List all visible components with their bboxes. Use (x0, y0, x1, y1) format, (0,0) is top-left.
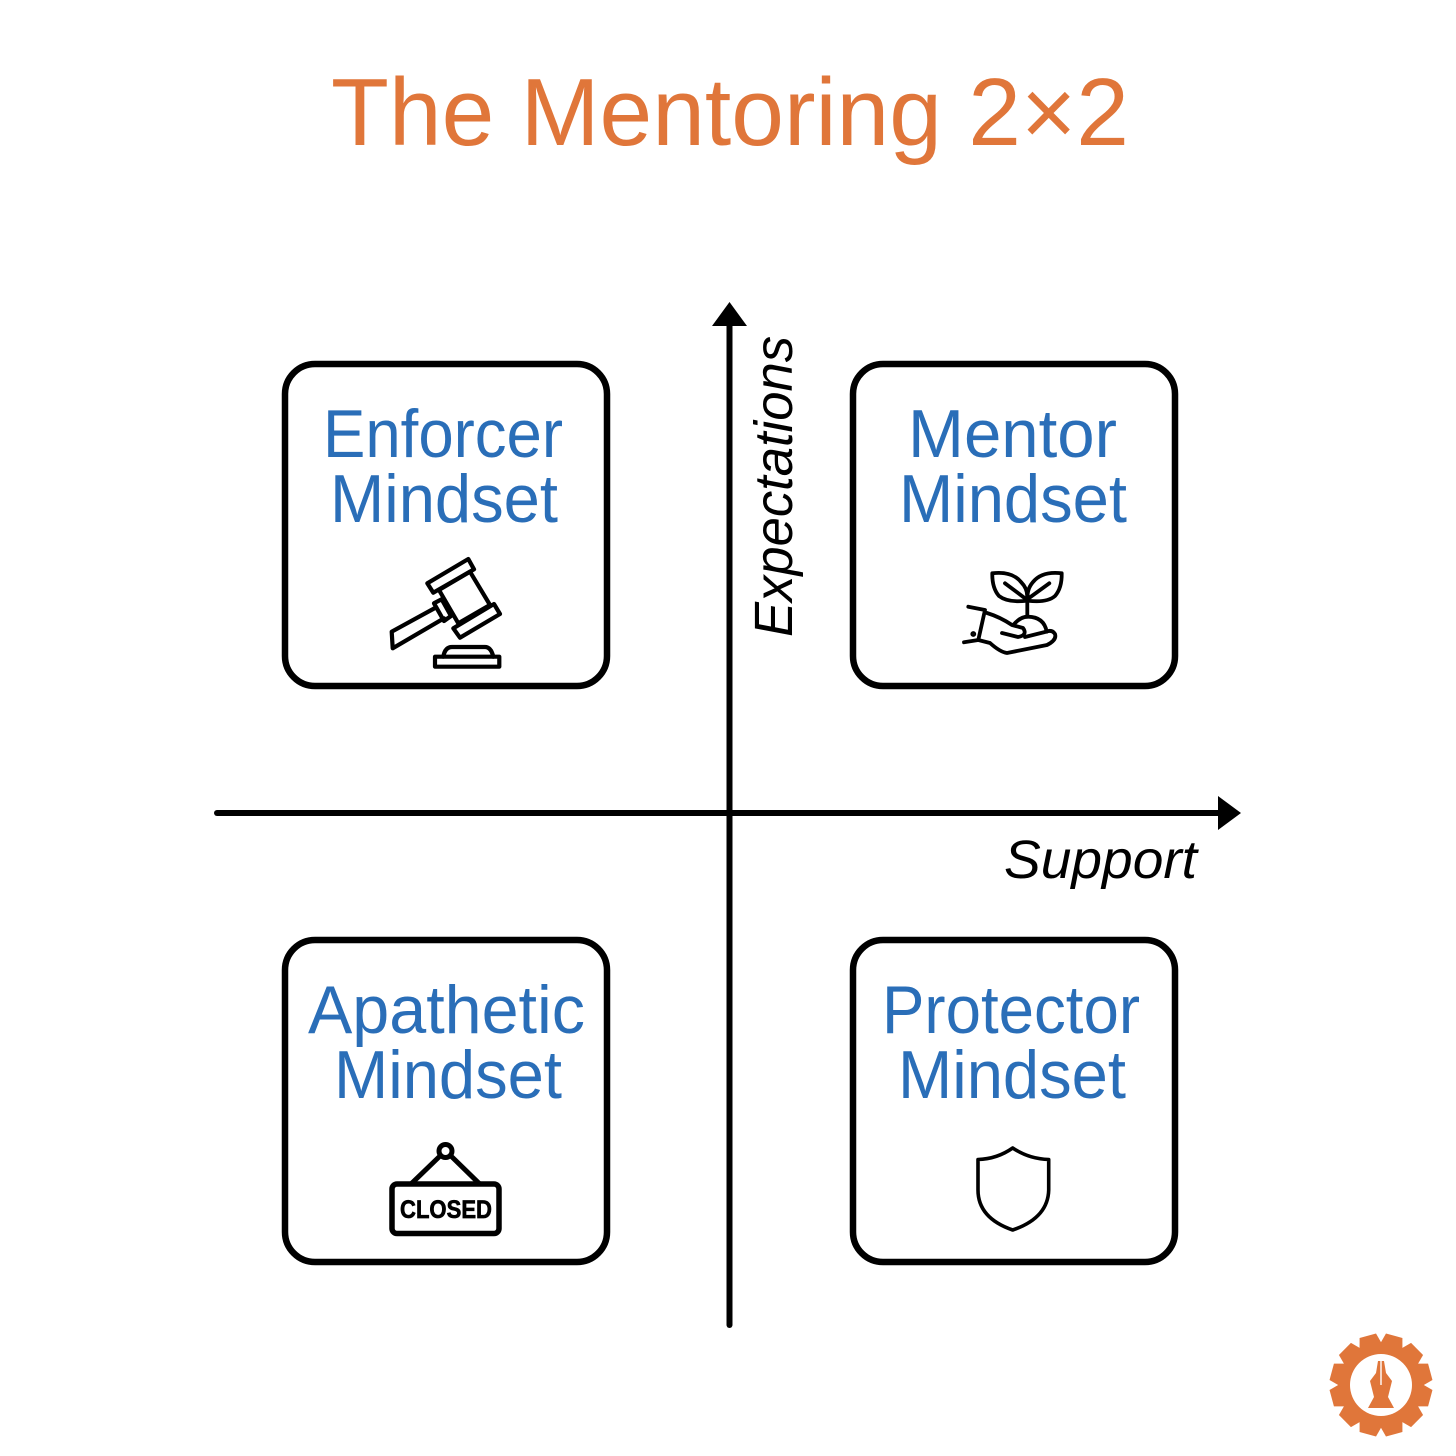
heading: mindset: Mindset (898, 1037, 1126, 1113)
panel: protector mindset (853, 940, 1175, 1262)
heading: enforcer: Enforcer (323, 396, 563, 472)
icon: gavel (392, 559, 500, 667)
heading: mindset: Mindset (330, 461, 558, 537)
axis label: support: Support (1004, 830, 1199, 890)
heading: protector: Protector (882, 972, 1140, 1048)
panel: mentor mindset (853, 364, 1175, 686)
heading: mentor: Mentor (908, 396, 1117, 472)
icon: hand holding plant (964, 573, 1062, 653)
icon: shield (978, 1148, 1049, 1230)
vertical axis arrow: expectations (712, 302, 747, 1325)
title: The Mentoring 2×2 (331, 59, 1129, 166)
axis label: expectations: Expectations (744, 336, 804, 637)
horizontal axis arrow: support (217, 796, 1241, 830)
heading: apathetic: Apathetic (308, 972, 585, 1048)
heading: mindset: Mindset (899, 461, 1127, 537)
logo: gear with pen nib (1329, 1333, 1433, 1437)
panel: enforcer mindset (285, 364, 607, 686)
heading: mindset: Mindset (334, 1037, 562, 1113)
icon: closed sign (392, 1144, 499, 1234)
icon: closed sign: CLOSED (400, 1196, 492, 1224)
panel: apathetic mindset (285, 940, 607, 1262)
